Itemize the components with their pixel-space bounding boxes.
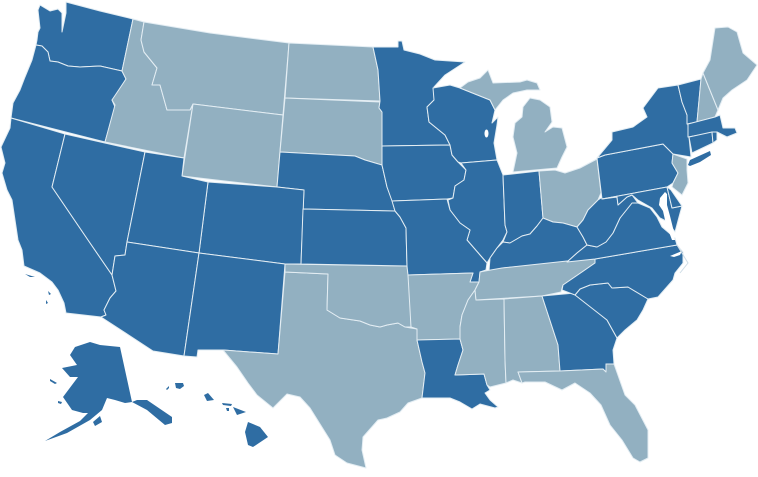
state: Utah <box>127 152 208 253</box>
state: West Virginia <box>577 195 638 247</box>
hawaii: Maui <box>233 407 246 415</box>
state: Minnesota <box>373 41 465 146</box>
state: Long Island <box>688 151 711 166</box>
state: Vermont <box>678 79 701 124</box>
hawaii: Oahu <box>204 393 214 401</box>
state: Kentucky <box>489 218 587 271</box>
alaska: St Lawrence island <box>50 379 57 384</box>
state: Oklahoma <box>285 264 411 327</box>
state: Virginia <box>567 203 677 262</box>
state: Iowa <box>382 145 466 201</box>
state: Tennessee <box>475 259 595 300</box>
state: Maine <box>703 27 757 110</box>
state: New York <box>597 85 691 158</box>
state: New Jersey <box>672 154 688 195</box>
state: Washington <box>36 2 133 71</box>
state: Alaska <box>45 342 172 441</box>
state: Colorado <box>199 182 304 264</box>
state: Michigan lower peninsula <box>513 98 567 172</box>
alaska: Nunivak island <box>58 401 62 404</box>
state: New Hampshire <box>697 73 718 122</box>
state: Kansas <box>301 209 407 266</box>
hawaii: Kauai <box>175 383 184 389</box>
state: Maryland <box>602 187 682 232</box>
state: North Carolina <box>562 245 683 299</box>
island: Door peninsula gap <box>484 130 488 138</box>
state: Arkansas <box>408 273 479 340</box>
state: Missouri <box>392 199 487 282</box>
state: Nebraska <box>277 152 395 211</box>
state: Connecticut <box>689 132 713 153</box>
state: Wyoming <box>182 104 283 187</box>
state: Illinois <box>448 160 507 263</box>
state: California <box>1 118 116 317</box>
state: Louisiana <box>417 339 498 409</box>
state: Ohio <box>539 159 601 227</box>
state: Georgia <box>542 293 617 372</box>
state: Alabama <box>504 296 560 383</box>
hawaii: Lanai <box>226 408 229 411</box>
state: Delaware <box>667 187 682 208</box>
state: Nevada <box>52 134 145 275</box>
state: Oregon <box>11 45 126 142</box>
state: Massachusetts <box>688 115 737 137</box>
state: South Carolina <box>575 283 648 338</box>
bay: Chesapeake <box>659 192 675 240</box>
state: Texas <box>223 272 425 468</box>
state: Pennsylvania <box>597 144 678 199</box>
alaska: Kodiak island <box>93 416 102 426</box>
state: Indiana <box>503 171 543 243</box>
state: Wisconsin <box>427 85 498 163</box>
hawaii: Niihau <box>166 386 169 390</box>
state: Montana <box>141 22 289 115</box>
state: South Dakota <box>280 98 382 165</box>
state: Mississippi <box>455 290 506 387</box>
alaska panhandle <box>132 400 172 425</box>
hawaii: Molokai <box>222 403 232 406</box>
outline: North Carolina outer banks <box>677 245 688 273</box>
state: Florida <box>518 364 648 462</box>
state: Michigan upper peninsula <box>460 70 540 110</box>
state: Arizona <box>101 242 199 356</box>
state: Hawaii <box>166 383 268 447</box>
state: Rhode Island <box>712 132 717 143</box>
islands: California channel <box>25 274 51 304</box>
sound: Pamlico <box>670 251 682 257</box>
state: New Mexico <box>184 253 285 357</box>
state: Idaho <box>105 19 193 158</box>
state: North Dakota <box>285 43 380 101</box>
